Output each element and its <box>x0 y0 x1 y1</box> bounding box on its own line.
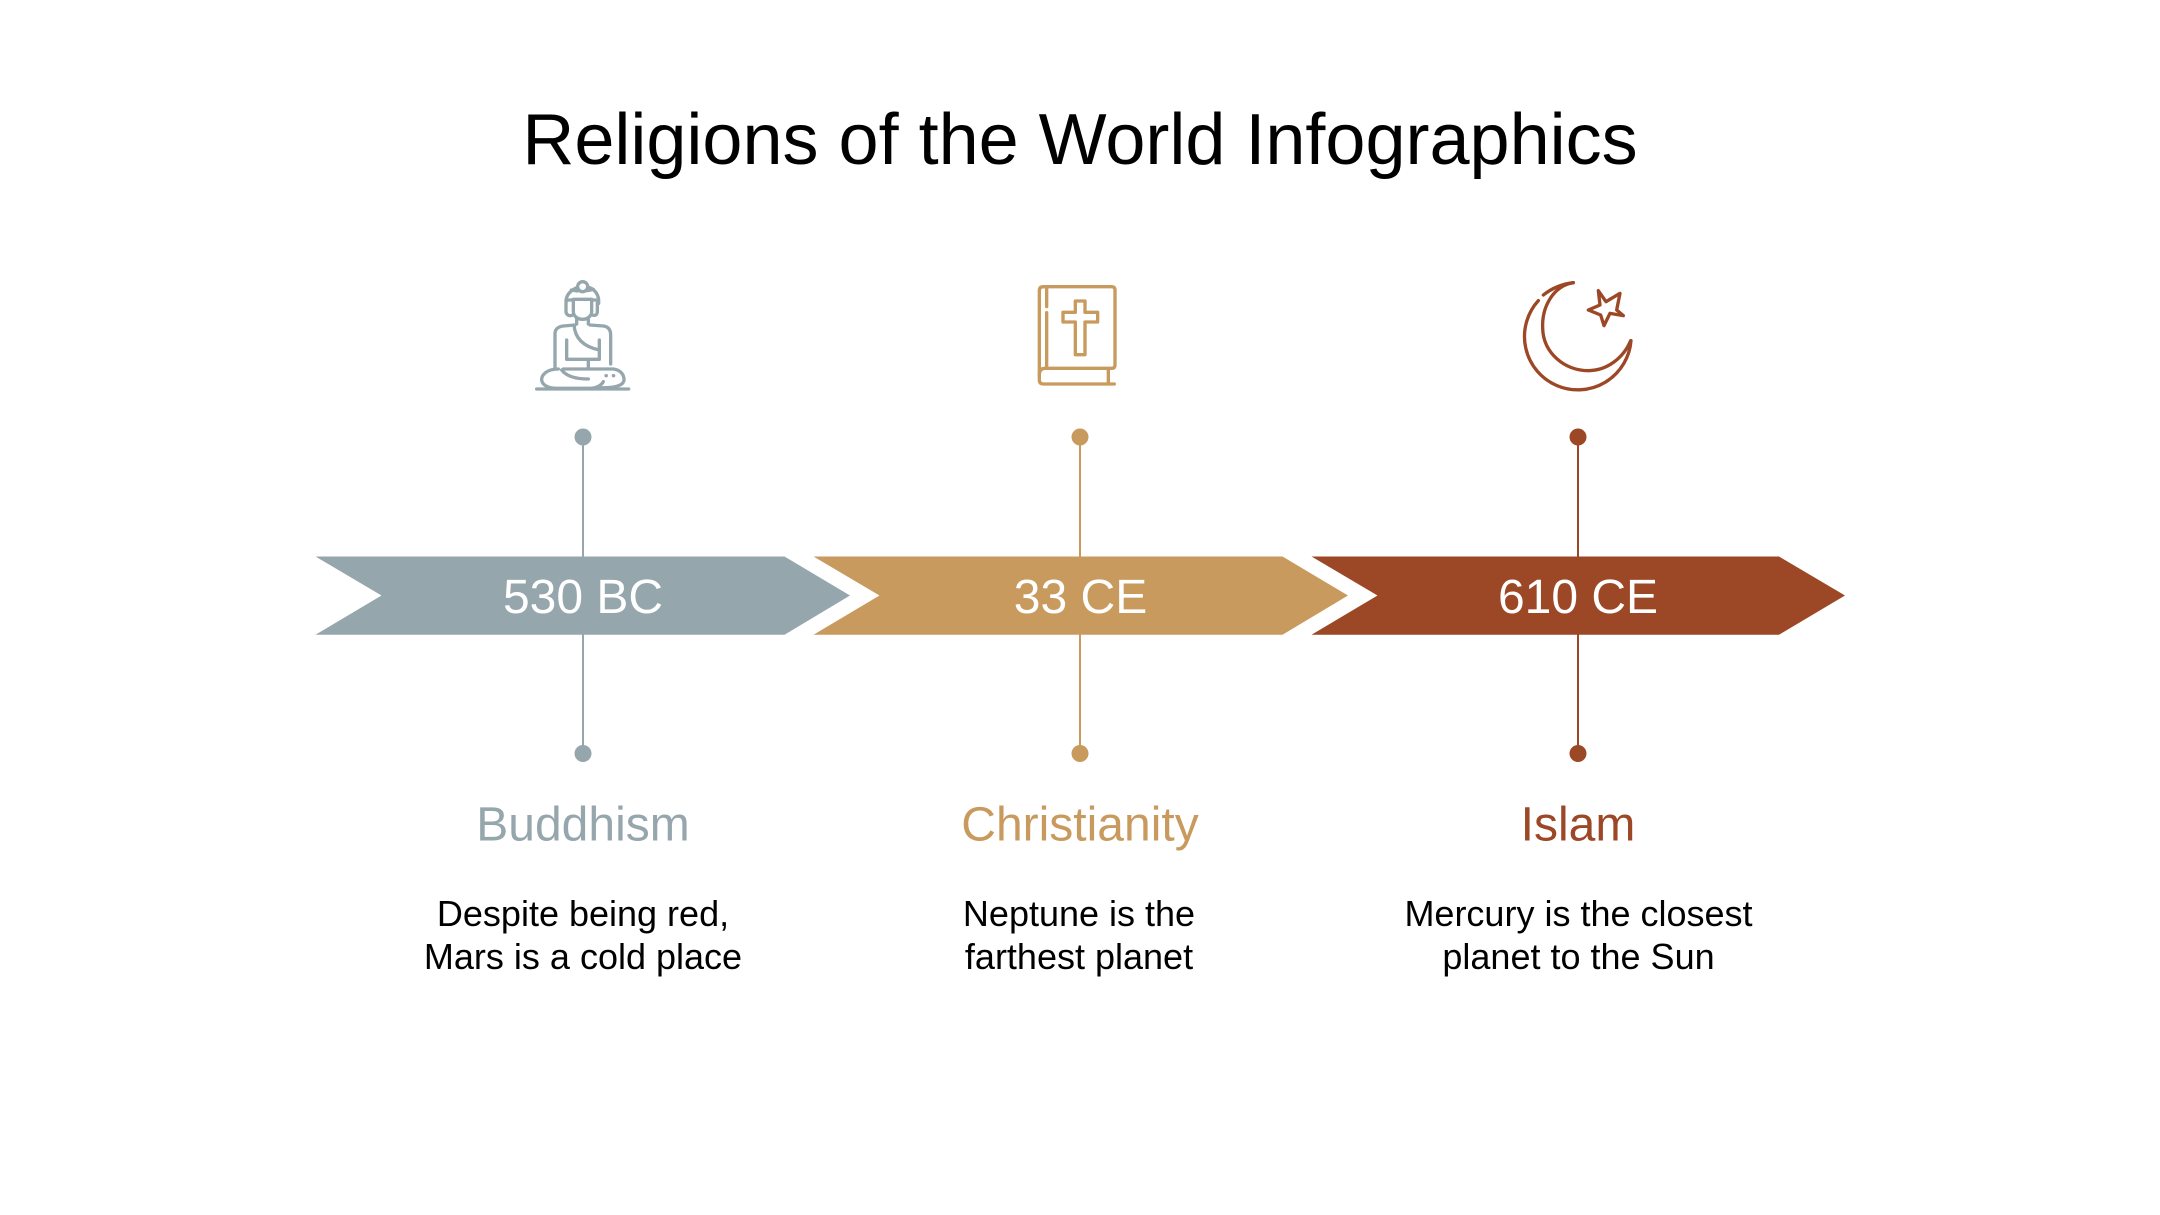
text: Christianity description: Neptune is the <box>963 893 1195 934</box>
connector: Islam <box>1570 428 1586 762</box>
icon: Bible with cross <box>1039 287 1115 384</box>
text: Buddhism description: Mars is a cold place <box>424 936 742 977</box>
arrow: 610 CE: 610 CE <box>1498 571 1658 624</box>
text: Christianity description: farthest planet <box>965 936 1193 977</box>
panel: Christianity <box>814 287 1348 977</box>
arrow: 33 CE: 33 CE <box>1014 571 1147 624</box>
heading: Christianity: Christianity <box>961 798 1199 852</box>
arrow: 610 CE <box>1312 556 1845 635</box>
title: Religions of the World Infographics <box>522 100 1638 180</box>
icon: crescent and star <box>1524 283 1631 390</box>
heading: Buddhism: Buddhism <box>476 798 690 852</box>
heading: Islam: Islam <box>1521 798 1635 852</box>
text: Islam description: planet to the Sun <box>1442 936 1715 977</box>
text: Islam description: Mercury is the closest <box>1404 893 1753 934</box>
panel: Buddhism <box>316 282 850 977</box>
arrow: 530 BC <box>316 556 850 635</box>
arrow: 530 BC: 530 BC <box>503 571 663 624</box>
panel: Islam <box>1312 283 1845 977</box>
connector: Christianity <box>1072 428 1088 762</box>
arrow: 33 CE <box>814 556 1348 635</box>
connector: Buddhism <box>574 428 592 762</box>
icon: meditating Buddha <box>537 282 629 389</box>
text: Buddhism description: Despite being red, <box>437 893 729 934</box>
